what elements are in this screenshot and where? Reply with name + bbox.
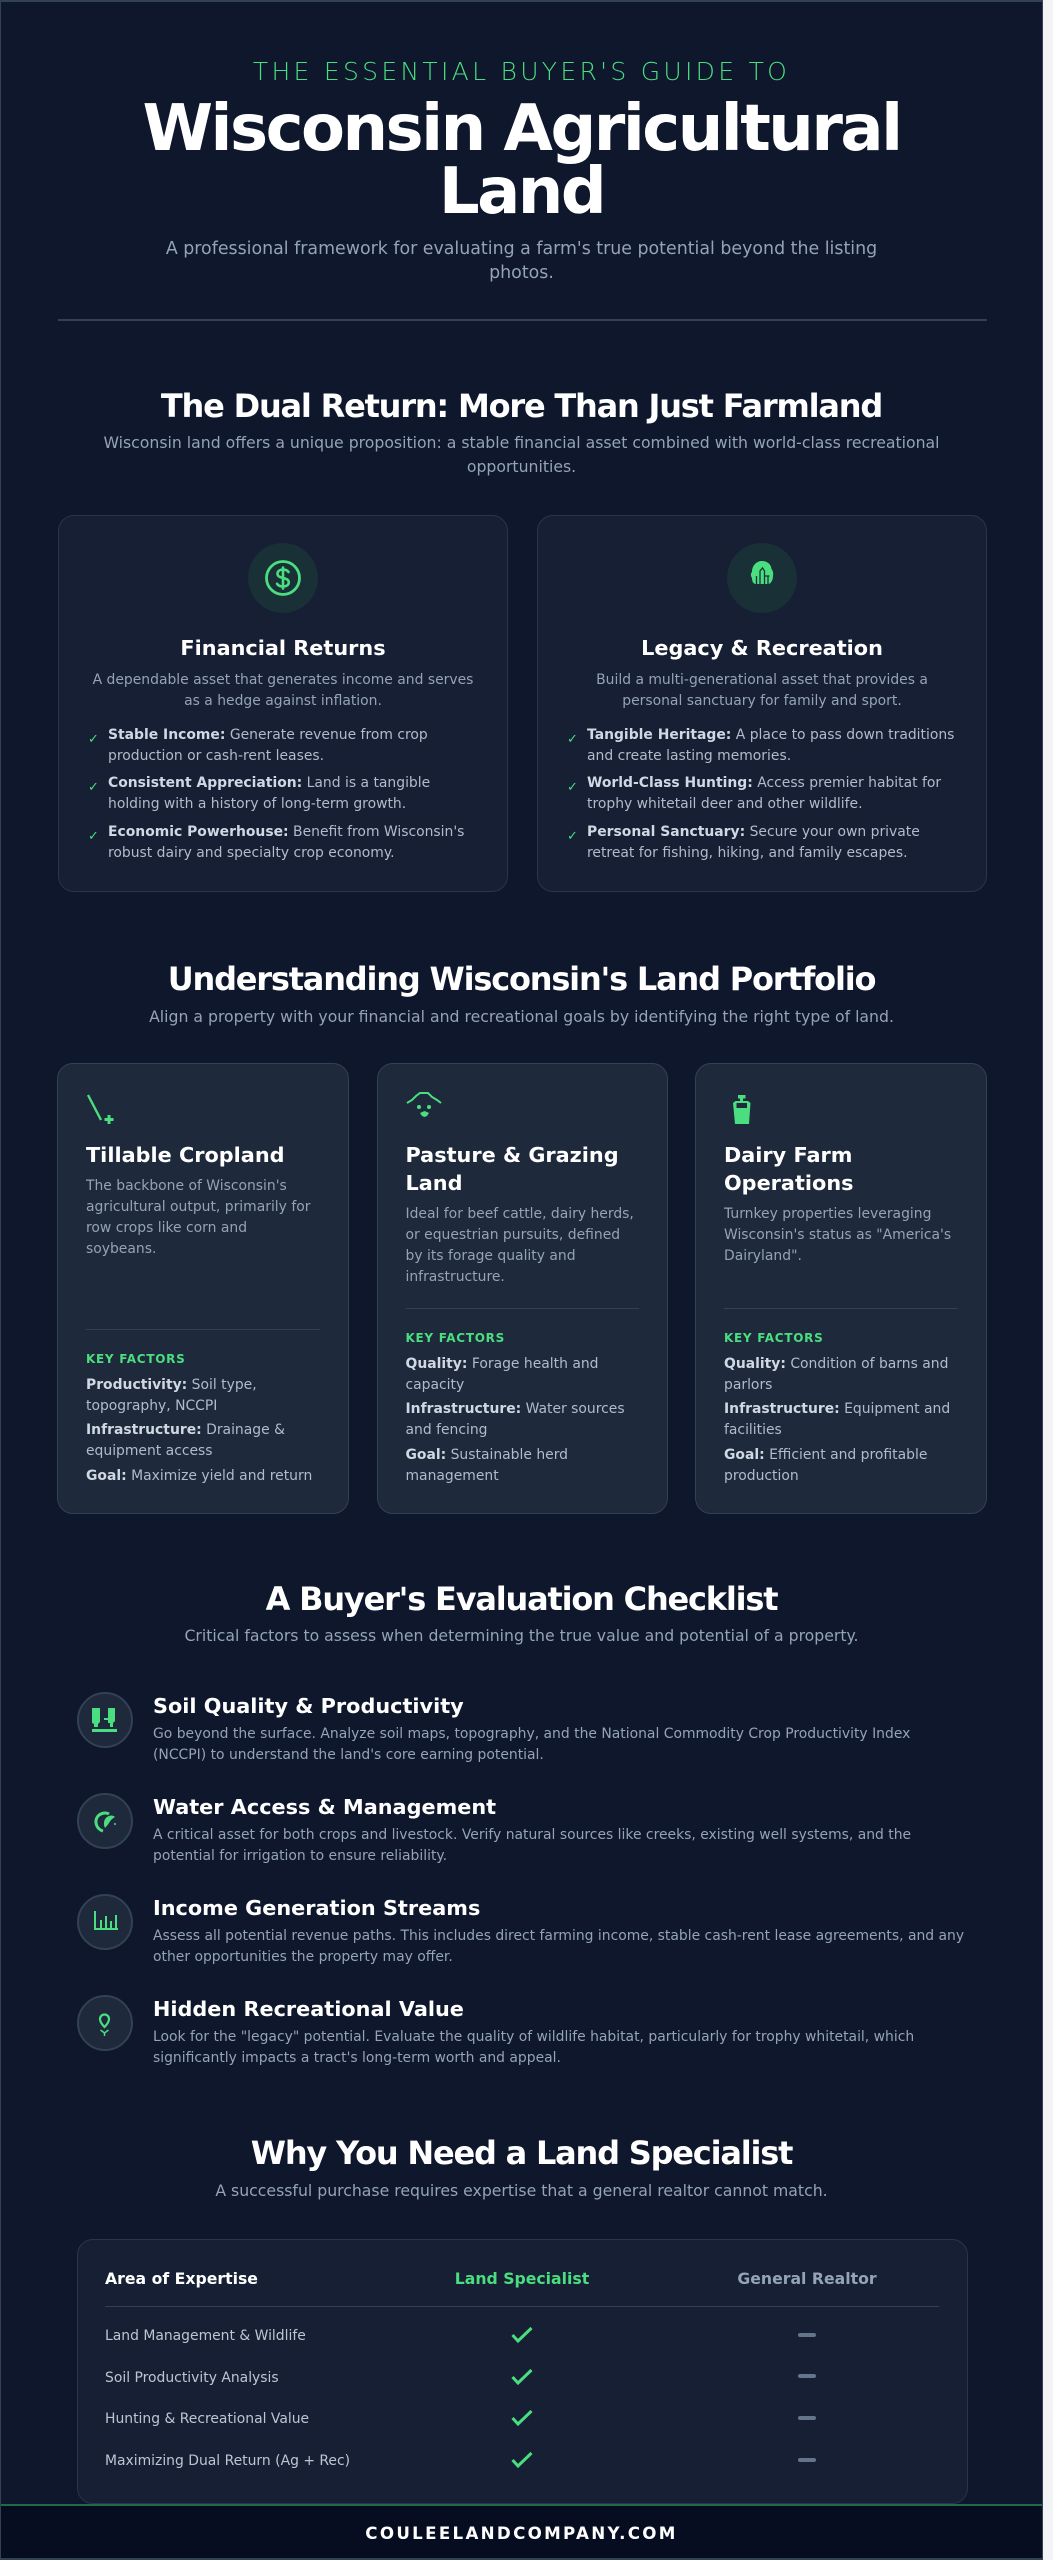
subtitle: photos.: [489, 263, 554, 283]
benefit: economic powerhouse: [88, 824, 464, 861]
item description: Look for the "legacy" potential. Evaluate the quality of wildlife habitat, particularly for trophy whitetail, which: [153, 2028, 914, 2044]
card description: [596, 672, 928, 708]
icon: dollar coin: [248, 543, 318, 613]
card description: [724, 1206, 951, 1264]
section intro: dual return: opportunities.: [467, 457, 576, 476]
card description: Build a multi-generational asset that provides a: [596, 672, 928, 688]
subtitle: A professional framework for evaluating a farm's true potential beyond the listing: [166, 238, 877, 258]
item title: Income Generation Streams: [153, 1896, 480, 1920]
factor: quality: Quality: Forage health and: [406, 1356, 598, 1372]
factor: infrastructure: equipment access: [86, 1443, 213, 1459]
card title: Dairy Farm: [724, 1143, 852, 1167]
section intro: dual return: [103, 432, 940, 476]
card description: or equestrian pursuits, defined: [406, 1226, 620, 1242]
card title: Tillable Cropland: [86, 1143, 285, 1167]
benefit: economic powerhouse: robust dairy and specialty crop economy.: [108, 845, 395, 861]
benefit: world-class hunting: trophy whitetail deer and other wildlife.: [587, 796, 862, 812]
row: land management: Land Management & Wildlife: [105, 2328, 306, 2344]
item description: Go beyond the surface. Analyze soil maps, topography, and the National Commodity Crop Productivity Index: [153, 1726, 910, 1742]
row: soil productivity: Soil Productivity Analysis: [105, 2370, 279, 2386]
card description: Wisconsin's status as "America's: [724, 1226, 951, 1242]
column header: general realtor: General Realtor: [737, 2269, 877, 2288]
card description: row crops like corn and: [86, 1220, 247, 1236]
item title: Hidden Recreational Value: [153, 1997, 464, 2021]
factor: quality: [724, 1356, 948, 1393]
card description: A dependable asset that generates income and serves: [93, 672, 473, 688]
card description: personal sanctuary for family and sport.: [622, 692, 902, 708]
card title: [406, 1143, 619, 1195]
item description: potential for irrigation to ensure reliability.: [153, 1848, 447, 1864]
section intro: land specialist: A successful purchase requires expertise that a general realtor cannot match.: [215, 2181, 828, 2200]
icon: cow: [406, 1092, 442, 1117]
benefit: tangible heritage: ✓: [567, 732, 578, 747]
factor: infrastructure: and fencing: [406, 1422, 488, 1438]
benefit: economic powerhouse: Economic Powerhouse: Benefit from Wisconsin's: [108, 824, 464, 840]
factor: quality: Quality: Condition of barns and: [724, 1356, 948, 1372]
checklist item: water access: [77, 1793, 911, 1864]
checklist item: recreational value: [77, 1995, 914, 2066]
factor: quality: parlors: [724, 1377, 772, 1393]
factor: infrastructure: Infrastructure: Water sources: [406, 1401, 625, 1417]
dash: [798, 2458, 816, 2462]
row: hunting value: Hunting & Recreational Value: [105, 2411, 309, 2427]
item description: significantly impacts a tract's long-term worth and appeal.: [153, 2050, 561, 2066]
benefit: world-class hunting: World-Class Hunting: Access premier habitat for: [587, 775, 941, 791]
section heading: checklist: A Buyer's Evaluation Checklist: [266, 1580, 777, 1618]
comparison table: [77, 2239, 968, 2504]
panel: financial returns: [58, 515, 508, 892]
benefit: stable income: ✓: [88, 732, 99, 747]
benefit: world-class hunting: [567, 775, 942, 812]
factor: infrastructure: Infrastructure: Equipment and: [724, 1401, 950, 1417]
card description: infrastructure.: [406, 1268, 505, 1284]
card description: Turnkey properties leveraging: [724, 1206, 931, 1222]
card description: [92, 672, 473, 708]
key factors label: KEY FACTORS: [724, 1331, 823, 1345]
column header: land specialist: Land Specialist: [455, 2269, 589, 2288]
check mark: [512, 2452, 532, 2468]
factor: goal: Goal: Efficient and profitable: [724, 1447, 927, 1463]
row: dual return: Maximizing Dual Return (Ag + Rec): [105, 2453, 350, 2469]
benefit: stable income: Stable Income: Generate revenue from crop: [108, 727, 428, 743]
card description: The backbone of Wisconsin's: [86, 1178, 287, 1194]
card description: as a hedge against inflation.: [184, 692, 382, 708]
dash: [798, 2332, 816, 2336]
benefit: stable income: [88, 727, 428, 764]
footer: [0, 2504, 1043, 2558]
benefit: consistent appreciation: holding with a history of long-term growth.: [108, 796, 406, 812]
eyebrow heading: THE ESSENTIAL BUYER'S GUIDE TO: [253, 57, 790, 86]
icon: map pin: [77, 1995, 133, 2051]
benefit: personal sanctuary: [567, 824, 920, 861]
benefit: consistent appreciation: [88, 775, 430, 812]
check mark: [512, 2410, 532, 2426]
item title: Soil Quality & Productivity: [153, 1694, 464, 1718]
card description: agricultural output, primarily for: [86, 1198, 310, 1214]
item description: [153, 2028, 914, 2066]
dash: [798, 2416, 816, 2420]
check mark: [512, 2326, 532, 2344]
factor: infrastructure: [724, 1401, 950, 1438]
factor: productivity: Productivity: Soil type,: [86, 1377, 257, 1393]
section intro: land portfolio: Align a property with your financial and recreational goals by identifying the right type of land.: [149, 1006, 894, 1026]
card description: by its forage quality and: [406, 1248, 576, 1264]
card title: Operations: [724, 1171, 854, 1195]
icon: plow: [87, 1094, 114, 1124]
factor: goal: [406, 1447, 568, 1484]
factor: quality: [406, 1356, 598, 1393]
item description: [153, 1826, 911, 1864]
item description: A critical asset for both crops and livestock. Verify natural sources like creeks, existing well systems, and the: [153, 1826, 911, 1842]
panel: tillable cropland: [57, 1063, 349, 1514]
check mark: [512, 2368, 532, 2386]
dash: [798, 2374, 816, 2378]
factor: infrastructure: [406, 1401, 625, 1438]
benefit: consistent appreciation: ✓: [88, 780, 99, 795]
benefit: personal sanctuary: retreat for fishing, hiking, and family escapes.: [587, 845, 908, 861]
card description: [86, 1178, 310, 1256]
title: Wisconsin Agricultural: [142, 92, 901, 166]
factor: goal: production: [724, 1468, 799, 1484]
benefit: personal sanctuary: ✓: [567, 829, 578, 844]
section heading: dual return: The Dual Return: More Than Just Farmland: [161, 387, 882, 425]
title: Land: [439, 155, 604, 229]
panel: pasture and grazing land: [377, 1063, 668, 1514]
factor: infrastructure: [86, 1422, 285, 1459]
panel: dairy farm operations: [695, 1063, 987, 1514]
card description: Ideal for beef cattle, dairy herds,: [406, 1206, 634, 1222]
card description: [406, 1206, 634, 1284]
item title: Water Access & Management: [153, 1795, 496, 1819]
benefit: consistent appreciation: Consistent Appreciation: Land is a tangible: [108, 775, 430, 791]
benefit: tangible heritage: [567, 727, 954, 764]
checklist item: soil quality: [77, 1692, 910, 1762]
benefit: tangible heritage: Tangible Heritage: A place to pass down traditions: [587, 727, 954, 743]
card title: Financial Returns: [180, 636, 386, 660]
icon: bar chart: [77, 1894, 133, 1950]
section intro: dual return: Wisconsin land offers a unique proposition: a stable financial asset combined with world-class recreational: [103, 432, 940, 452]
factor: infrastructure: Infrastructure: Drainage &: [86, 1422, 285, 1438]
footer website: COULEELANDCOMPANY.COM: [365, 2523, 678, 2543]
factor: goal: Goal: Maximize yield and return: [86, 1468, 312, 1484]
icon: legacy tree: [727, 543, 797, 613]
card title: [724, 1143, 854, 1195]
card description: Dairyland".: [724, 1248, 802, 1264]
item description: (NCCPI) to understand the land's core earning potential.: [153, 1746, 544, 1762]
checklist item: income streams: [77, 1894, 964, 1964]
icon: water: [77, 1793, 133, 1849]
subtitle: [166, 238, 877, 283]
column header: area of expertise: Area of Expertise: [105, 2269, 258, 2288]
icon: soil: [77, 1692, 133, 1748]
benefit: economic powerhouse: ✓: [88, 829, 99, 844]
section intro: checklist: Critical factors to assess when determining the true value and potential of a property.: [184, 1626, 859, 1645]
title: [142, 92, 901, 229]
benefit: personal sanctuary: Personal Sanctuary: Secure your own private: [587, 824, 920, 840]
section heading: land specialist: Why You Need a Land Specialist: [251, 2134, 792, 2172]
factor: quality: capacity: [406, 1377, 464, 1393]
card title: Land: [406, 1171, 462, 1195]
factor: goal: management: [406, 1468, 499, 1484]
factor: goal: Goal: Sustainable herd: [406, 1447, 568, 1463]
item description: [153, 1928, 964, 1964]
benefit: tangible heritage: and create lasting memories.: [587, 748, 791, 764]
item description: [153, 1726, 910, 1762]
icon: milk bottle: [733, 1095, 750, 1124]
card description: soybeans.: [86, 1240, 156, 1256]
benefit: world-class hunting: ✓: [567, 780, 578, 795]
key factors label: KEY FACTORS: [86, 1352, 185, 1366]
item description: other opportunities the property may offer.: [153, 1948, 453, 1964]
factor: productivity: topography, NCCPI: [86, 1398, 217, 1414]
section heading: land portfolio: Understanding Wisconsin's Land Portfolio: [168, 960, 875, 998]
item description: Assess all potential revenue paths. This includes direct farming income, stable cash-rent lease agreements, and any: [153, 1928, 964, 1944]
factor: infrastructure: facilities: [724, 1422, 782, 1438]
panel: legacy and recreation: [537, 515, 987, 892]
card title: Pasture & Grazing: [406, 1143, 619, 1167]
factor: goal: [724, 1447, 927, 1484]
benefit: stable income: production or cash-rent leases.: [108, 748, 324, 764]
card title: Legacy & Recreation: [641, 636, 883, 660]
factor: productivity: [86, 1377, 257, 1414]
key factors label: KEY FACTORS: [406, 1331, 505, 1345]
